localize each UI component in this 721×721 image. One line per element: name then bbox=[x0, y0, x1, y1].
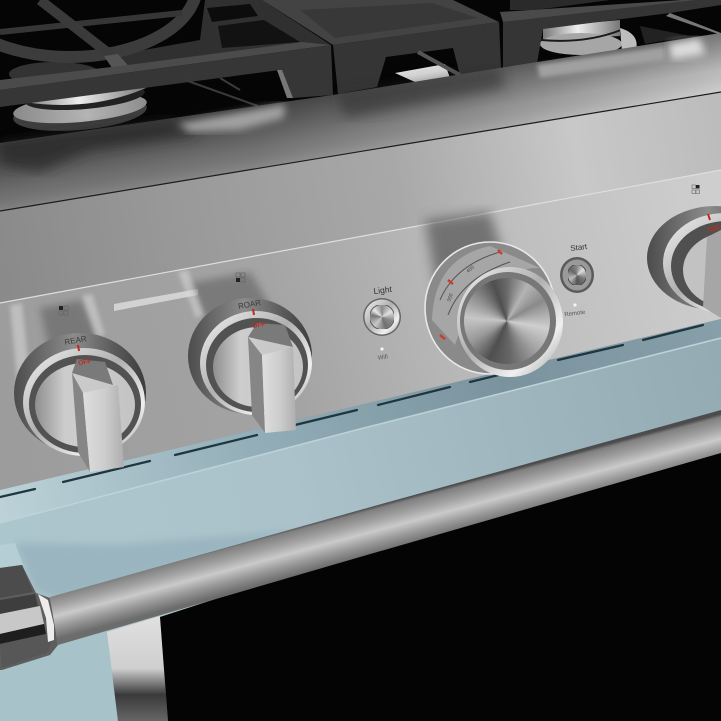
wifi indicator bbox=[380, 347, 384, 351]
under-grate bars bbox=[185, 78, 258, 106]
remote indicator bbox=[573, 303, 577, 307]
grate: right burner bbox=[500, 0, 721, 68]
crease line bbox=[0, 92, 721, 211]
light button label: Light bbox=[373, 284, 393, 296]
dial reflection on panel bbox=[425, 212, 505, 285]
burner: left bbox=[9, 62, 148, 136]
right knob reflection bbox=[190, 272, 270, 320]
knob: right edge: OFF bbox=[707, 225, 721, 234]
burner: right bbox=[540, 20, 637, 55]
dial cone face bbox=[464, 278, 550, 364]
panel: blue top lip bbox=[0, 319, 721, 523]
dial bezel bbox=[457, 267, 563, 377]
grate: left burner grate bbox=[0, 0, 333, 107]
knob: right edge bbox=[647, 185, 721, 318]
panel streak reflections bbox=[10, 270, 204, 410]
start button label: Start bbox=[570, 242, 588, 253]
door steel frame bbox=[107, 616, 168, 721]
vent slots bbox=[0, 325, 703, 497]
panel: lower steel fascia bbox=[0, 170, 721, 490]
nameplate strip bbox=[114, 289, 198, 311]
dial collar bbox=[425, 242, 555, 374]
start button bbox=[560, 257, 594, 293]
oven window bbox=[160, 448, 721, 721]
dial: oven temperature: 400 bbox=[465, 264, 476, 275]
knob: centre-left: OFF bbox=[252, 321, 266, 330]
handle mount bbox=[0, 565, 58, 670]
rail: front face bbox=[0, 45, 333, 107]
wifi label: Wifi bbox=[378, 354, 388, 362]
rail: top face bbox=[0, 42, 331, 90]
grate: middle griddle block bbox=[262, 0, 501, 94]
remote label: Remote bbox=[564, 310, 586, 318]
panel: upper steel band bbox=[0, 92, 721, 303]
blue corner bbox=[0, 543, 23, 568]
knob: left: OFF bbox=[78, 358, 92, 367]
blue lower door bbox=[0, 630, 118, 721]
dial: oven temperature: 350 bbox=[446, 293, 455, 303]
blue bevel highlight bbox=[0, 338, 721, 523]
zone icon bbox=[236, 273, 245, 282]
oven handle bar bbox=[50, 410, 721, 645]
cooktop dark recess bbox=[0, 0, 721, 160]
left knob reflection bbox=[40, 300, 100, 355]
knob: centre-left: ROAR bbox=[237, 298, 262, 311]
cooktop steel surface bbox=[0, 33, 721, 211]
seam line bbox=[0, 170, 721, 303]
grate openings bbox=[207, 4, 258, 22]
light button bbox=[363, 298, 401, 336]
knob: left bbox=[14, 306, 146, 472]
panel: blue door front bbox=[0, 338, 721, 680]
dial: oven temperature bbox=[425, 242, 563, 377]
zone icon bbox=[59, 306, 68, 315]
knob: left: REAR bbox=[64, 334, 88, 347]
zone icon bbox=[692, 185, 700, 194]
knob: centre-left bbox=[188, 273, 312, 433]
blue shaded recess bbox=[15, 530, 300, 600]
